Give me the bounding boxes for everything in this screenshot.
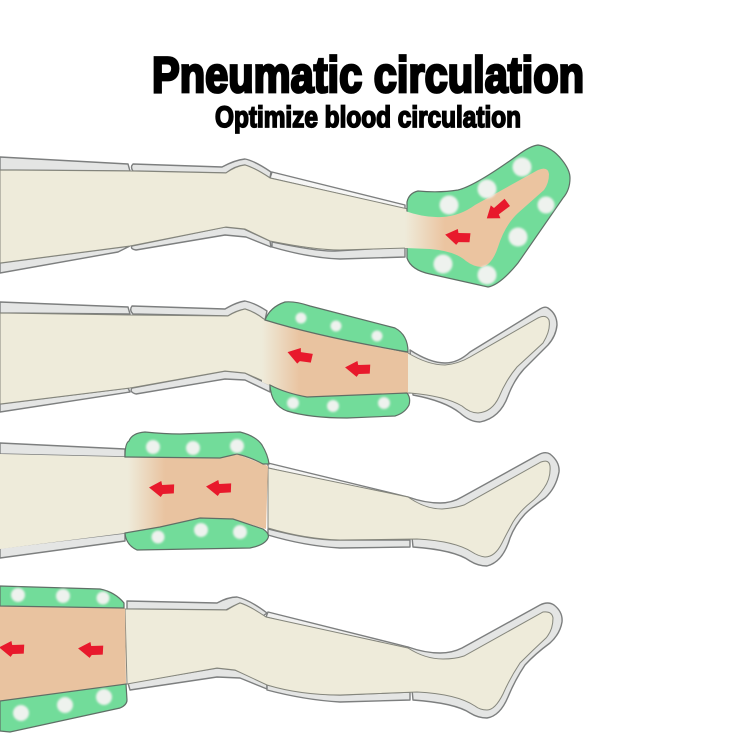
subtitle: Optimize blood circulation xyxy=(215,101,521,134)
arrows xyxy=(286,345,370,378)
arrows xyxy=(149,480,231,497)
highlighted thigh xyxy=(0,606,126,701)
highlighted foot xyxy=(405,169,549,267)
leg tube outlines xyxy=(0,301,557,422)
leg skin xyxy=(268,461,550,557)
foot cuff air cells xyxy=(434,158,554,284)
arrows xyxy=(444,196,512,246)
knee cuff bottom, green xyxy=(125,518,268,550)
calf cuff top, green xyxy=(265,302,408,352)
arrows xyxy=(0,640,103,659)
leg 1: foot cuff inflated xyxy=(0,145,570,287)
thigh cuff air cells xyxy=(11,588,112,721)
thigh cuff top, green xyxy=(0,586,124,608)
title: Pneumatic circulation xyxy=(152,47,584,103)
leg tube outlines xyxy=(0,157,405,273)
highlighted calf xyxy=(262,319,408,398)
foot cuff, green xyxy=(407,145,570,287)
highlighted knee xyxy=(125,454,268,533)
leg skin xyxy=(0,309,549,413)
leg tube outlines xyxy=(0,443,559,566)
leg 2: calf cuff inflated xyxy=(0,301,557,422)
leg skin xyxy=(125,603,553,710)
leg tube outlines xyxy=(127,597,562,718)
knee cuff top, green xyxy=(125,432,269,464)
thigh cuff bottom, green xyxy=(0,684,127,732)
calf cuff bottom, green xyxy=(270,385,410,418)
leg 4: thigh cuff inflated xyxy=(0,586,562,732)
leg 3: knee cuff inflated xyxy=(0,432,559,566)
knee cuff air cells xyxy=(146,439,247,544)
leg skin xyxy=(0,165,408,263)
calf cuff air cells xyxy=(287,312,390,412)
